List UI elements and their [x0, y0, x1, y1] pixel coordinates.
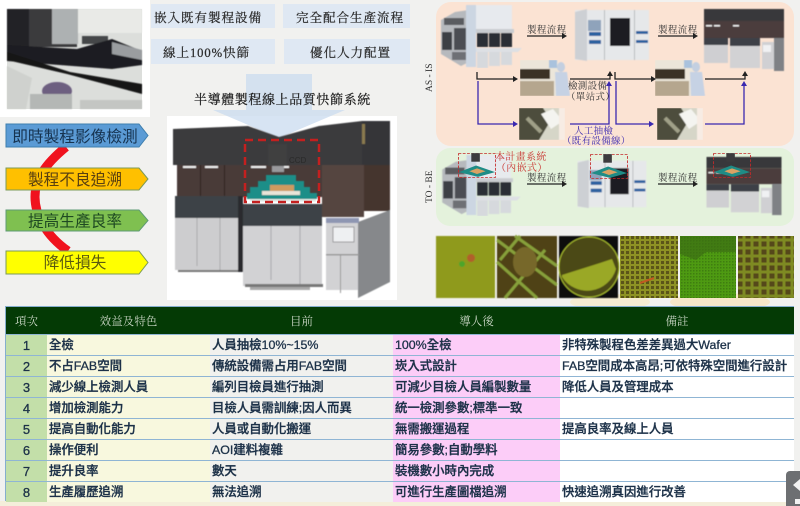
feature box: inline screening: 線上100%快篩: [163, 45, 250, 60]
label: AS-IS: AS - IS: [425, 63, 435, 92]
text: 5: [23, 422, 30, 436]
text: 編列目檢員進行抽測: [212, 380, 324, 394]
feature box: staffing: 優化人力配置: [310, 45, 391, 60]
banner: real-time imaging: [6, 124, 148, 147]
table header: 導人後: [459, 316, 494, 328]
text: 提升良率: [49, 464, 99, 478]
panel: AS-IS: 製程流程: [658, 24, 698, 36]
panel: AS-IS: （單站式）: [566, 91, 615, 103]
panel: AS-IS: 人工抽檢: [574, 125, 613, 137]
comparison table: [5, 306, 794, 501]
panel: TO-BE: [436, 148, 794, 226]
table header: 效益及特色: [100, 316, 157, 328]
banner: real-time imaging: 即時製程影像檢測: [12, 128, 138, 146]
banner: reduce loss: 降低損失: [44, 254, 107, 272]
main machine illustration: [173, 121, 390, 298]
banner: reduce loss: [6, 251, 148, 274]
feature box: embed in existing equipment: 嵌入既有製程設備: [154, 10, 262, 25]
text: 降低人員及管理成本: [562, 380, 674, 394]
main machine illustration: CCD: [289, 156, 307, 165]
text: 數天: [212, 464, 237, 478]
inspection images row: [436, 236, 794, 298]
feature box: embed in existing equipment: [151, 4, 275, 28]
text: 3: [23, 380, 30, 394]
system title: 半導體製程線上品質快篩系統: [194, 92, 371, 107]
text: AOI建料複雜: [212, 442, 283, 456]
text: 無法追溯: [212, 484, 262, 498]
banner: defect tracing: [6, 168, 148, 190]
text: 8: [23, 484, 30, 500]
text: 統一檢測參數;標準一致: [395, 400, 522, 414]
text: 目檢人員需訓練;因人而異: [212, 400, 352, 414]
text: 增加檢測能力: [49, 400, 123, 414]
panel: TO-BE: 製程流程: [658, 172, 698, 184]
text: 無需搬運過程: [395, 422, 469, 436]
text: 提高良率及線上人員: [562, 422, 674, 436]
table header: [6, 307, 794, 334]
text: 6: [23, 442, 30, 458]
text: 減少線上檢測人員: [49, 380, 148, 394]
panel: AS-IS: （既有設備線）: [562, 135, 631, 147]
text: 操作便利: [49, 442, 99, 456]
text: 可減少目檢人員編製數量: [395, 380, 531, 394]
table header: 備註: [666, 316, 688, 328]
text: 不占FAB空間: [49, 358, 122, 372]
text: 2: [23, 358, 30, 374]
banner: raise yield: [6, 210, 148, 231]
table header: 項次: [15, 316, 38, 328]
text: 快速追溯真因進行改善: [562, 484, 686, 498]
machine row: [441, 5, 784, 140]
panel: AS-IS: 製程流程: [527, 24, 567, 36]
text: 人員或自動化搬運: [212, 422, 311, 436]
big down arrow: [213, 74, 345, 138]
feature box: production flow: [283, 4, 410, 28]
panel: TO-BE: 製程流程: [527, 172, 567, 184]
table header: 目前: [290, 316, 313, 328]
banner: defect tracing: 製程不良追溯: [28, 171, 122, 189]
photo: wafer inspection head: [0, 0, 150, 117]
panel: TO-BE: 本計畫系統: [495, 150, 547, 163]
text: 生產履歷追溯: [49, 484, 123, 498]
text: 裝機數小時內完成: [395, 464, 494, 478]
feature box: production flow: 完全配合生產流程: [296, 10, 404, 25]
text: 傳統設備需占用FAB空間: [212, 358, 347, 372]
label: TO-BE: TO - BE: [425, 170, 435, 203]
feature box: inline screening: [151, 39, 275, 64]
text: 全檢: [49, 338, 74, 352]
text: 4: [23, 400, 30, 416]
text: 提高自動化能力: [49, 422, 136, 436]
text: 人員抽檢10%~15%: [212, 338, 318, 352]
text: 非特殊製程色差差異過大Wafer: [562, 338, 731, 352]
banner: raise yield: 提高生產良率: [28, 212, 122, 230]
main equipment white panel: [167, 116, 397, 300]
text: 1: [23, 338, 30, 352]
panel: AS-IS: 檢測設備: [568, 80, 607, 92]
teal wafer grid: [247, 175, 317, 202]
text: 100%全檢: [395, 338, 451, 352]
text: 簡易參數;自動學料: [395, 442, 498, 456]
feature box: staffing: [284, 39, 410, 64]
text: FAB空間成本高昂;可依特殊空間進行設計: [562, 358, 787, 372]
text: 7: [23, 464, 30, 478]
panel: TO-BE: （內嵌式）: [496, 161, 548, 174]
text: 可進行生產圖檔追溯: [395, 484, 507, 498]
text: 崁入式設計: [395, 358, 457, 372]
red connector arc: [35, 147, 68, 251]
panel: AS-IS: [436, 2, 794, 147]
